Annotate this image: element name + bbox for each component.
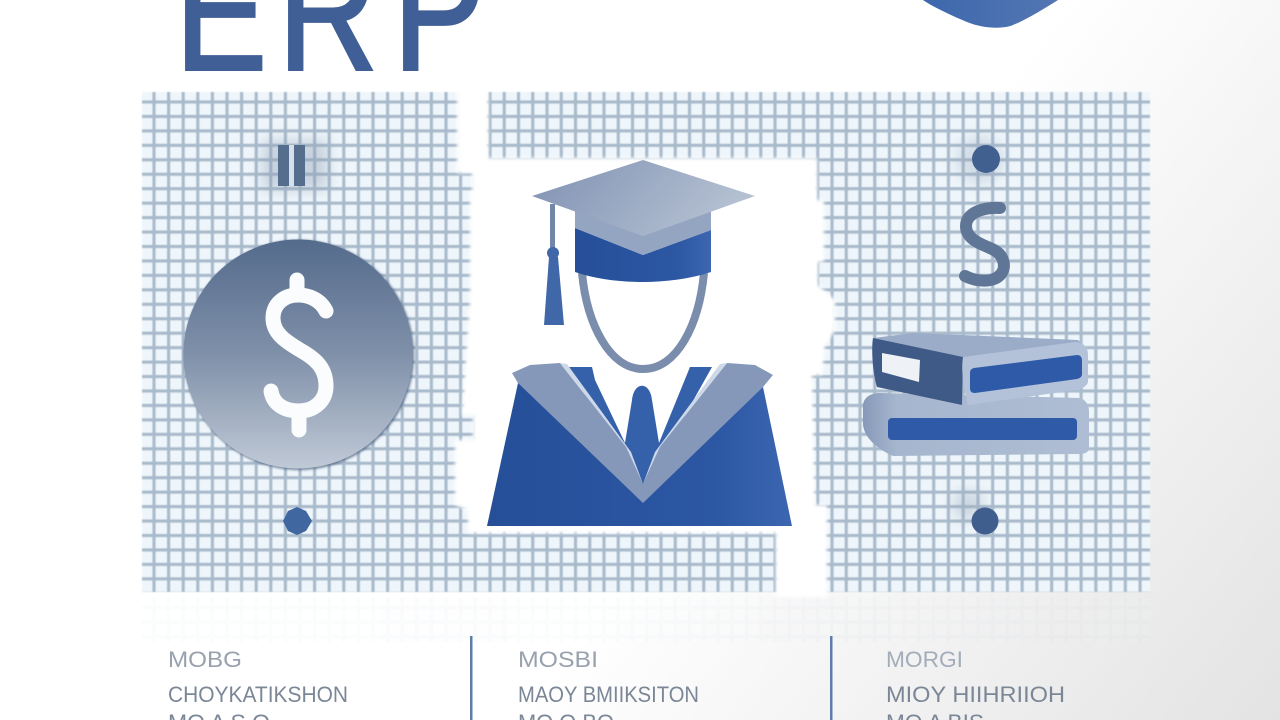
lapels — [512, 363, 773, 503]
column 1 text: CHOYKATIKSHON — [168, 682, 348, 707]
tassel — [544, 204, 564, 325]
icon: small striped square — [262, 140, 328, 190]
tie and inner collar — [568, 367, 712, 490]
column 2 text: MOSBI — [518, 647, 598, 672]
icon: graduate figure — [487, 160, 792, 526]
grid panel — [142, 92, 1150, 592]
cap blue band — [575, 228, 711, 282]
icon: letter S — [965, 208, 1004, 281]
divider 1 — [470, 636, 472, 720]
cap light band — [575, 205, 711, 255]
column 3 text — [886, 647, 1065, 720]
upper book label — [882, 353, 920, 382]
upper book front — [962, 342, 1088, 405]
column 2 text — [518, 647, 699, 720]
white centre panel — [455, 88, 835, 597]
divider 2 — [830, 636, 832, 720]
dollar sign — [271, 280, 326, 430]
column 3 text: MIOY HIIHRIIOH — [886, 682, 1065, 707]
chin strap — [582, 273, 704, 369]
lower book — [863, 393, 1089, 456]
upper book cover top — [873, 333, 1086, 362]
gown body — [487, 383, 792, 526]
faded grid band below panel — [142, 597, 1150, 642]
icon: lower right dot — [952, 489, 998, 534]
cap top — [532, 160, 755, 236]
column 3 text: MORGI — [886, 647, 963, 672]
icon: stacked books — [863, 333, 1089, 456]
column 1 text — [168, 647, 348, 720]
lower book blue stripe — [888, 418, 1077, 440]
icon: top right dot — [956, 136, 1004, 184]
icon: left dot — [283, 507, 312, 535]
lapel highlights — [560, 363, 727, 484]
column 2 text: MAOY BMIIKSITON — [518, 682, 699, 707]
icon: dollar coin — [184, 240, 414, 470]
upper book blue stripe — [970, 355, 1082, 393]
icon: shield at top — [923, 0, 1058, 28]
column 1 text: MOBG — [168, 647, 242, 672]
upper book spine — [872, 338, 963, 405]
